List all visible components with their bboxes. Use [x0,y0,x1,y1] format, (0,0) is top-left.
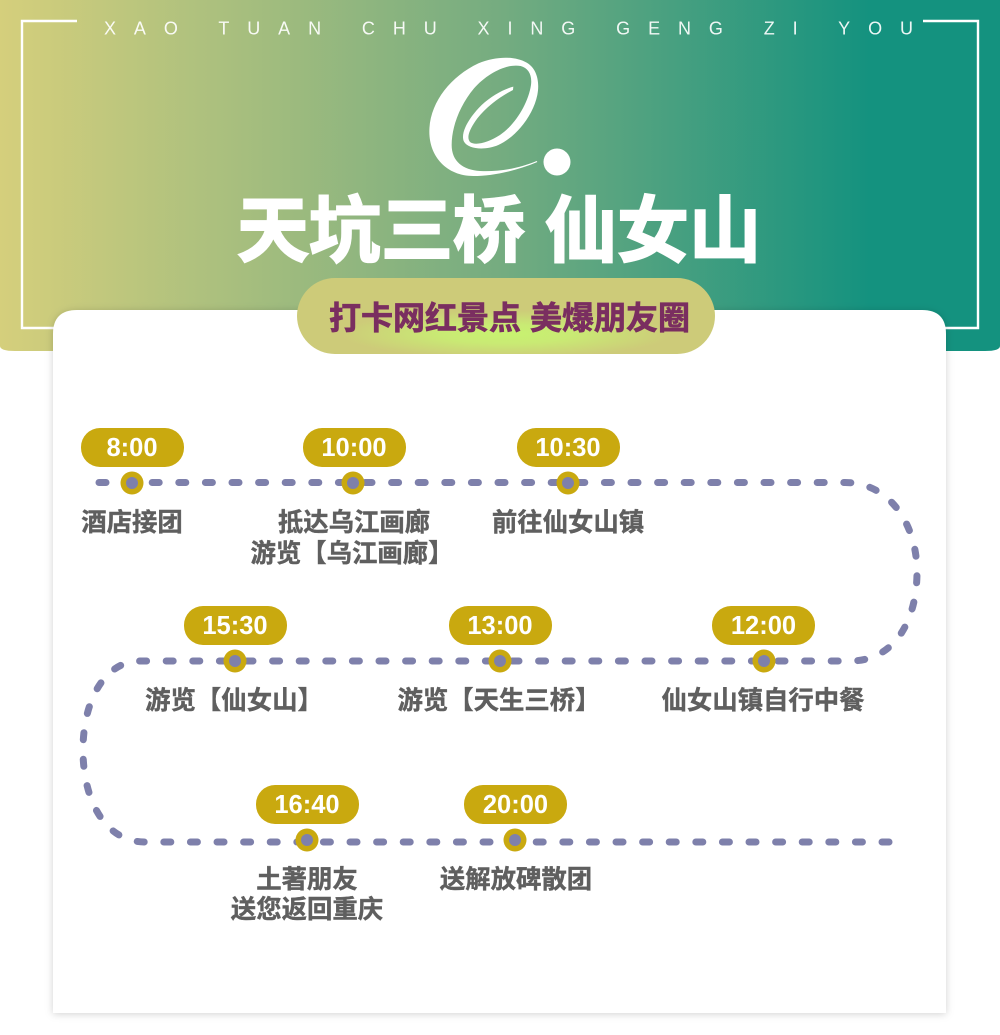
stop: 20:00 [440,785,592,894]
stop: 10:00 [250,428,454,568]
subtitle text: 打卡网红景点 美爆朋友圈 [329,300,690,336]
stop: 15:30: 游览【仙女山】 [145,687,323,715]
stop: 10:30: 前往仙女山镇 [492,509,644,537]
stop: 10:00: 抵达乌江画廊 [278,509,430,537]
stop: 12:00 [661,606,865,715]
stop: 16:40: 送您返回重庆 [231,896,383,924]
stop: 15:30 [145,606,323,715]
stop: 8:00: 8:00 [106,434,158,462]
stop: 12:00: 仙女山镇自行中餐 [661,687,865,715]
pinyin tagline: XAO TUAN CHU XING GENG ZI YOU [104,18,913,38]
pill background [297,278,715,354]
subtitle pill [297,278,715,354]
dashed route line [83,482,917,842]
main title: 天坑三桥 仙女山 [237,192,761,272]
stop: 20:00: 20:00 [483,791,548,819]
stop: 20:00: 送解放碑散团 [440,866,592,894]
stop: 16:40: 土著朋友 [256,866,358,894]
stop: 10:30: 10:30 [535,434,601,462]
stop: 10:00: 10:00 [321,434,387,462]
stop: 13:00: 13:00 [467,612,533,640]
icon: script letter e logo [429,58,570,176]
stop: 13:00: 游览【天生三桥】 [397,687,601,715]
stop: 13:00 [397,606,601,715]
stop: 8:00: 酒店接团 [81,509,183,537]
stop: 16:40 [231,785,383,924]
decorative white frame [22,21,978,328]
stop: 12:00: 12:00 [731,612,796,640]
panel: itinerary card [53,310,946,1013]
header gradient background [0,0,1000,351]
stop: 10:00: 游览【乌江画廊】 [250,540,454,568]
stop: 16:40: 16:40 [274,791,340,819]
stop: 15:30: 15:30 [202,612,268,640]
stop: 10:30 [492,428,644,537]
stop: 8:00 [81,428,184,537]
